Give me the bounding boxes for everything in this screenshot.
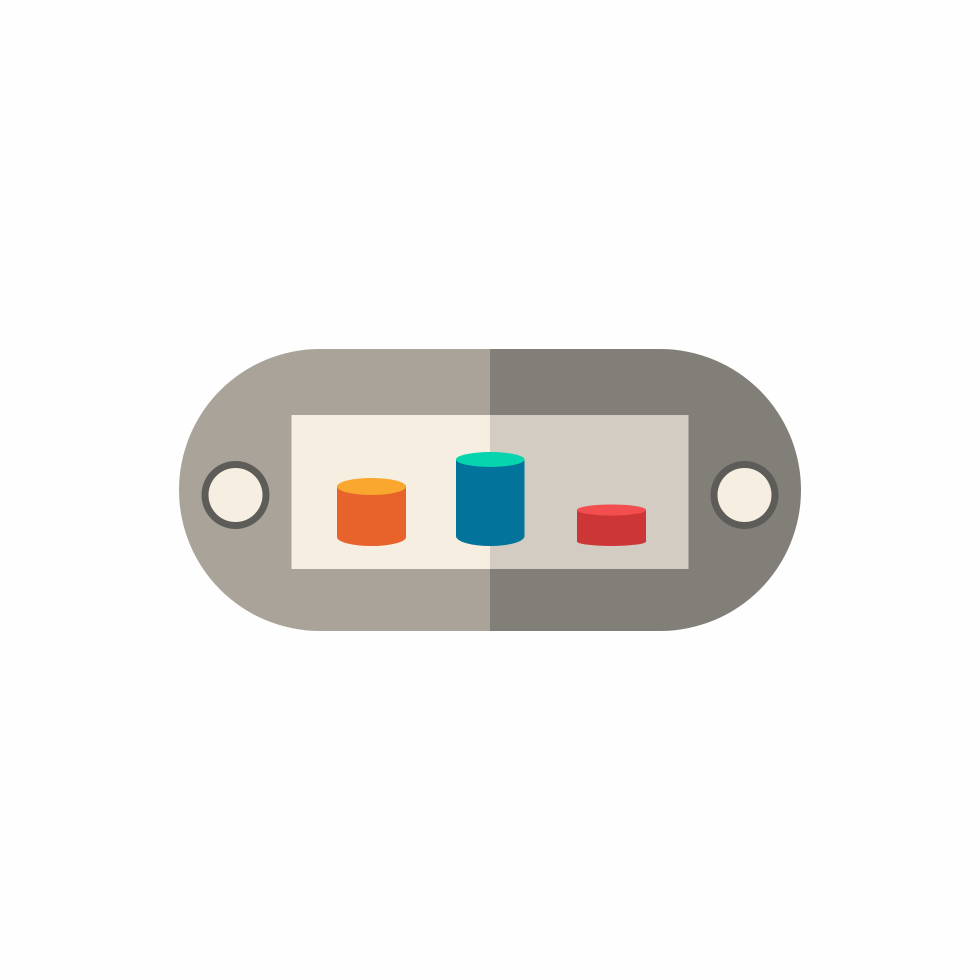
right button [710,461,778,529]
orange cylinder [337,478,406,546]
left button [202,461,270,529]
device body [179,349,801,631]
screen panel [292,415,688,569]
red cylinder [577,504,646,546]
blue cylinder [456,452,524,546]
